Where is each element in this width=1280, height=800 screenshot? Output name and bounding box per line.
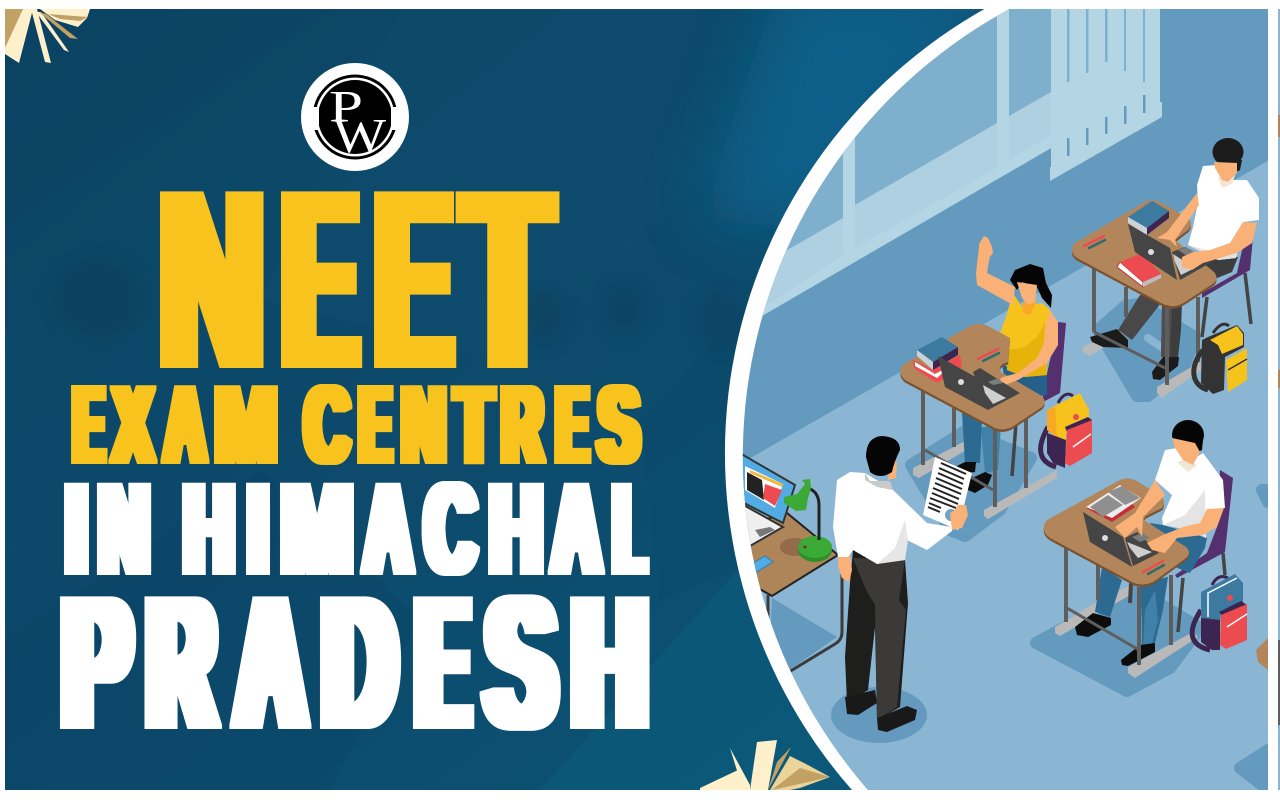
hair and face [1010, 264, 1052, 308]
title: IN HIMACHAL: A [365, 458, 411, 601]
title: EXAM CENTRES: A [165, 364, 205, 486]
student bottom right [1044, 420, 1247, 678]
chair [1012, 322, 1066, 476]
top [1000, 293, 1050, 377]
shadow under side desk [770, 598, 837, 673]
neck [888, 460, 897, 480]
title: NEET: T [464, 140, 551, 420]
student top right [1072, 138, 1259, 398]
desk shadow group [911, 304, 1268, 790]
torso t-shirt [1188, 165, 1259, 260]
title: EXAM CENTRES: E [360, 364, 390, 486]
open book [1086, 485, 1141, 522]
t-shirt [1155, 448, 1225, 538]
desk [900, 324, 1044, 432]
jeans [962, 365, 1047, 473]
title: IN HIMACHAL: I [66, 458, 87, 601]
title: IN HIMACHAL: I [248, 458, 268, 601]
title: IN HIMACHAL: M [281, 458, 353, 601]
red folders [1117, 253, 1161, 287]
title: EXAM CENTRES: E [557, 364, 587, 486]
backpack [1194, 324, 1247, 394]
laptop [738, 452, 795, 546]
desk legs [1094, 265, 1198, 385]
title: NEET: N [160, 140, 263, 420]
title: EXAM CENTRES: C [305, 364, 349, 486]
book [1128, 201, 1169, 235]
title: PRADESH: S [487, 558, 555, 767]
desk [1044, 478, 1189, 587]
classroom illustration [742, 9, 1268, 790]
head [1212, 138, 1244, 188]
shoes [845, 690, 917, 732]
title: EXAM CENTRES: N [402, 364, 445, 486]
chair [1130, 470, 1233, 632]
bench bars [1083, 326, 1204, 398]
title: EXAM CENTRES: M [215, 364, 277, 486]
books stack [913, 337, 962, 383]
pens [1084, 236, 1105, 248]
background panel [5, 0, 1020, 790]
collar [865, 473, 893, 490]
right hand [950, 505, 968, 530]
window blinds [1050, 0, 1162, 181]
title: EXAM CENTRES: S [599, 364, 639, 486]
student raising hand [900, 236, 1092, 519]
decoration: open book top left [5, 9, 90, 63]
logo: PW [301, 63, 409, 171]
desk top [730, 513, 838, 596]
laptop [1083, 512, 1159, 567]
desk at far right [1256, 638, 1268, 670]
title: EXAM CENTRES: R [502, 364, 542, 486]
phone [751, 556, 773, 572]
title: IN HIMACHAL: A [553, 458, 600, 601]
arms [1157, 193, 1257, 270]
bench bars [1055, 585, 1198, 678]
title: PRADESH: E [418, 558, 467, 767]
floor shadow [831, 687, 927, 743]
title: EXAM CENTRES: T [456, 364, 492, 486]
teacher [831, 436, 972, 743]
title: EXAM CENTRES: X [114, 364, 152, 486]
side desk with laptop and lamp [730, 452, 842, 675]
desk legs [1066, 545, 1171, 665]
trousers [1118, 256, 1238, 357]
back wall [742, 9, 1268, 790]
desk [1072, 200, 1216, 309]
title: EXAM CENTRES: E [74, 364, 103, 486]
trousers [845, 550, 908, 720]
arms [1115, 480, 1224, 553]
bench bars [913, 437, 1057, 519]
title: NEET: E [284, 140, 356, 420]
left hand [838, 553, 852, 582]
jeans [1095, 523, 1207, 646]
title: IN HIMACHAL: N [99, 458, 149, 601]
laptop [938, 356, 1020, 410]
backpack [1041, 393, 1092, 468]
decoration: open book bottom [700, 740, 830, 790]
desk legs [923, 390, 1026, 507]
shoes [1090, 329, 1179, 380]
floor [742, 161, 1268, 790]
lamp [780, 479, 832, 562]
title: PRADESH: R [148, 558, 214, 767]
text: L [615, 458, 644, 601]
title: PRADESH: P [63, 558, 130, 767]
title: PRADESH: H [573, 558, 646, 767]
laptop [1128, 224, 1212, 280]
head [1172, 420, 1204, 472]
title: PRADESH: D [323, 558, 395, 767]
arms [976, 247, 1058, 387]
window panel [762, 9, 1051, 316]
logo: PW: P [329, 82, 363, 131]
chair shadow highlight [1148, 338, 1170, 353]
raised hand [979, 236, 993, 258]
backpack [1192, 574, 1247, 650]
chair [1202, 237, 1253, 337]
hair [866, 436, 900, 476]
pens [978, 349, 999, 361]
shoes [1075, 613, 1155, 666]
title: PRADESH: A [237, 558, 304, 767]
white circular frame [725, 0, 1280, 800]
shirt [833, 472, 952, 564]
logo: PW: W [333, 108, 387, 163]
right edge sliver [1278, 9, 1280, 790]
title: IN HIMACHAL: C [426, 458, 475, 601]
shoes [957, 462, 992, 493]
title: NEET: E [377, 140, 451, 420]
paper [923, 457, 972, 530]
pens [1143, 561, 1164, 574]
title: IN HIMACHAL: H [184, 458, 234, 601]
title: IN HIMACHAL: H [490, 458, 542, 601]
